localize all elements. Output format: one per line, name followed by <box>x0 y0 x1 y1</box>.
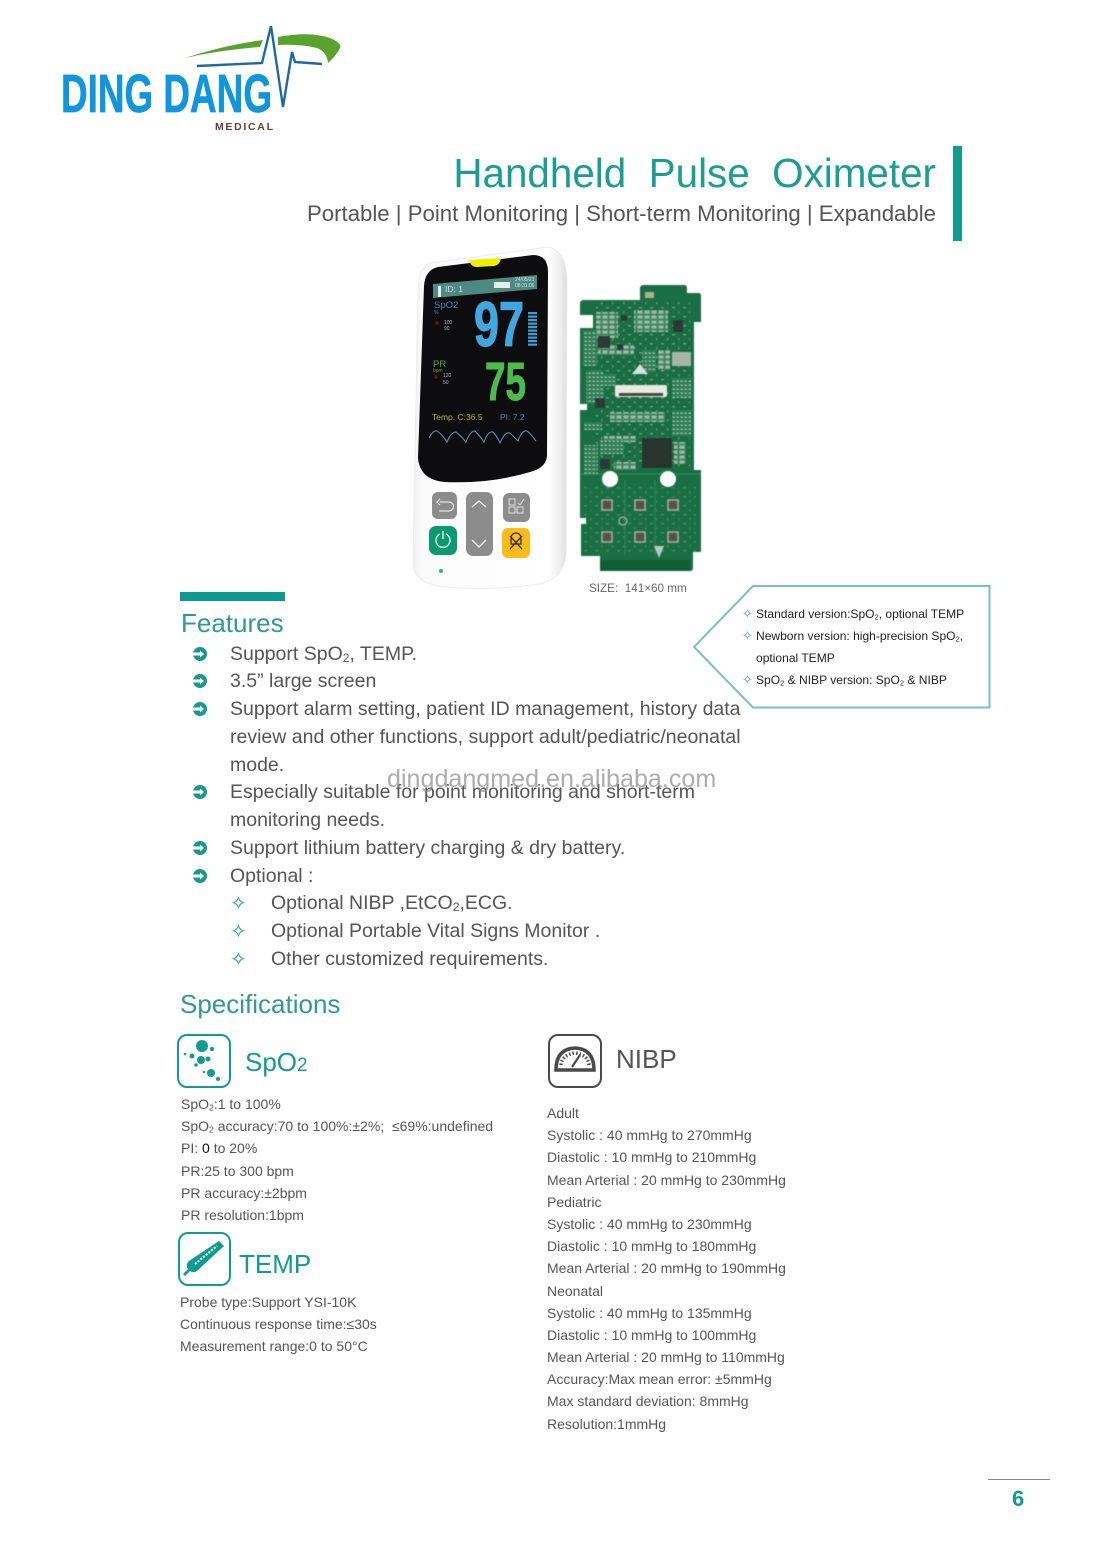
callout: version options: SpO2 & NIBP version: SpO2 & NIBP <box>756 673 947 687</box>
heading: Features: Features <box>181 608 284 638</box>
icon: NIBP gauge <box>548 1034 602 1088</box>
logo: Ding Dang Medical: DING DANG <box>61 64 272 124</box>
device photo: handheld oximeter: 08:31:06 <box>515 283 535 289</box>
NIBP specifications: Systolic : 40 mmHg to 135mmHg <box>547 1305 752 1321</box>
NIBP specifications: Max standard deviation: 8mmHg <box>547 1393 749 1409</box>
TEMP specifications: Probe type:Support YSI-10K <box>180 1294 356 1310</box>
SpO2 specifications: SpO2:1 to 100% <box>181 1096 281 1113</box>
NIBP specifications: Mean Arterial : 20 mmHg to 110mmHg <box>547 1349 785 1365</box>
device photo: handheld oximeter: Temp. C:36.5 <box>432 412 483 422</box>
device photo: handheld oximeter: PR <box>433 359 446 370</box>
logo: Ding Dang Medical: MEDICAL <box>215 121 274 133</box>
features list: 3.5” large screen <box>230 670 376 692</box>
device photo: handheld oximeter: 100 <box>444 320 453 326</box>
features list: Optional Portable Vital Signs Monitor . <box>271 920 600 942</box>
NIBP specifications: Neonatal <box>547 1282 603 1298</box>
SpO2 specifications: PI: 0 to 20% <box>181 1140 257 1156</box>
TEMP specifications: Measurement range:0 to 50°C <box>180 1338 368 1354</box>
device photo: handheld oximeter: 75 <box>485 352 526 412</box>
device photo: handheld oximeter: PI: 7.2 <box>500 412 525 422</box>
callout: version options: optional TEMP <box>756 651 835 665</box>
device photo: handheld oximeter: 97 <box>474 290 524 360</box>
NIBP specifications: Systolic : 40 mmHg to 270mmHg <box>547 1127 752 1143</box>
callout: version options: ✧ <box>742 629 753 644</box>
heading: NIBP: NIBP <box>616 1044 677 1074</box>
NIBP specifications: Diastolic : 10 mmHg to 180mmHg <box>547 1238 756 1254</box>
callout: version options: Standard version:SpO2, optional TEMP <box>756 607 964 621</box>
logo: Ding Dang Medical <box>61 26 340 133</box>
SpO2 specifications <box>181 1096 493 1223</box>
page number <box>988 1479 1050 1512</box>
NIBP specifications: Adult <box>547 1105 579 1121</box>
icon: thermometer <box>178 1232 231 1286</box>
NIBP specifications: Pediatric <box>547 1194 601 1210</box>
SpO2 specifications: PR:25 to 300 bpm <box>181 1163 294 1179</box>
SpO2 specifications: SpO2 accuracy:70 to 100%:±2%; ≤69%:undefined <box>181 1118 493 1135</box>
title accent bar <box>953 146 962 241</box>
SpO2 specifications: PR resolution:1bpm <box>181 1207 304 1223</box>
callout: version options <box>692 585 990 708</box>
subtitle: Portable | Point Monitoring | Short-term Monitoring | Expandable <box>307 201 936 226</box>
features list: mode. <box>230 754 284 776</box>
icon: SpO2 bubbles <box>177 1034 231 1088</box>
features list: Support SpO2, TEMP. <box>230 642 417 665</box>
callout: version options: Newborn version: high-precision SpO2, <box>756 629 963 643</box>
features list: ✧ <box>230 919 247 943</box>
device photo: handheld oximeter <box>412 246 568 589</box>
heading: TEMP: TEMP <box>239 1249 311 1279</box>
features list: ✧ <box>230 891 247 915</box>
page number: 6 <box>1012 1486 1024 1511</box>
features list <box>193 642 741 971</box>
features list: review and other functions, support adult/pediatric/neonatal <box>230 726 741 748</box>
features list: ✧ <box>230 947 247 971</box>
heading: SpO2: SpO2 <box>245 1047 308 1077</box>
device photo: handheld oximeter: 120 <box>443 373 452 379</box>
NIBP specifications: Systolic : 40 mmHg to 230mmHg <box>547 1216 752 1232</box>
circuit board photo <box>579 284 702 572</box>
TEMP specifications <box>180 1294 377 1354</box>
features list: Other customized requirements. <box>271 948 548 970</box>
NIBP specifications: Accuracy:Max mean error: ±5mmHg <box>547 1371 772 1387</box>
NIBP specifications: Diastolic : 10 mmHg to 210mmHg <box>547 1149 756 1165</box>
device photo: handheld oximeter: 50 <box>443 380 449 386</box>
device photo: handheld oximeter: bpm <box>433 368 443 374</box>
TEMP specifications: Continuous response time:≤30s <box>180 1316 377 1332</box>
NIBP specifications: Mean Arterial : 20 mmHg to 230mmHg <box>547 1172 786 1188</box>
NIBP specifications: Mean Arterial : 20 mmHg to 190mmHg <box>547 1260 786 1276</box>
size label: SIZE: 141×60 mm <box>589 582 687 595</box>
NIBP specifications: Resolution:1mmHg <box>547 1416 666 1432</box>
title: Handheld Pulse Oximeter <box>453 150 936 196</box>
features list: Optional NIBP ,EtCO2,ECG. <box>271 892 513 914</box>
NIBP specifications: Diastolic : 10 mmHg to 100mmHg <box>547 1327 756 1343</box>
NIBP specifications <box>547 1105 786 1432</box>
features accent bar <box>180 592 285 601</box>
callout: version options: ✧ <box>742 673 753 688</box>
callout: version options: ✧ <box>742 607 753 622</box>
features list: Support lithium battery charging & dry battery. <box>230 837 625 859</box>
watermark: dingdangmed.en.alibaba.com <box>387 765 716 793</box>
features list: Especially suitable for point monitoring and short-term <box>230 781 695 803</box>
device photo: handheld oximeter: 24/05/21 <box>515 277 535 283</box>
SpO2 specifications: PR accuracy:±2bpm <box>181 1185 307 1201</box>
features list: Optional : <box>230 864 313 886</box>
features list: Support alarm setting, patient ID management, history data <box>230 698 741 720</box>
features list: monitoring needs. <box>230 809 385 831</box>
device photo: handheld oximeter: SpO2 <box>434 300 458 311</box>
heading: Specifications: Specifications <box>180 989 340 1019</box>
device photo: handheld oximeter: 90 <box>444 326 450 332</box>
device photo: handheld oximeter: ID: 1 <box>445 284 463 294</box>
device photo: handheld oximeter: % <box>434 310 439 316</box>
